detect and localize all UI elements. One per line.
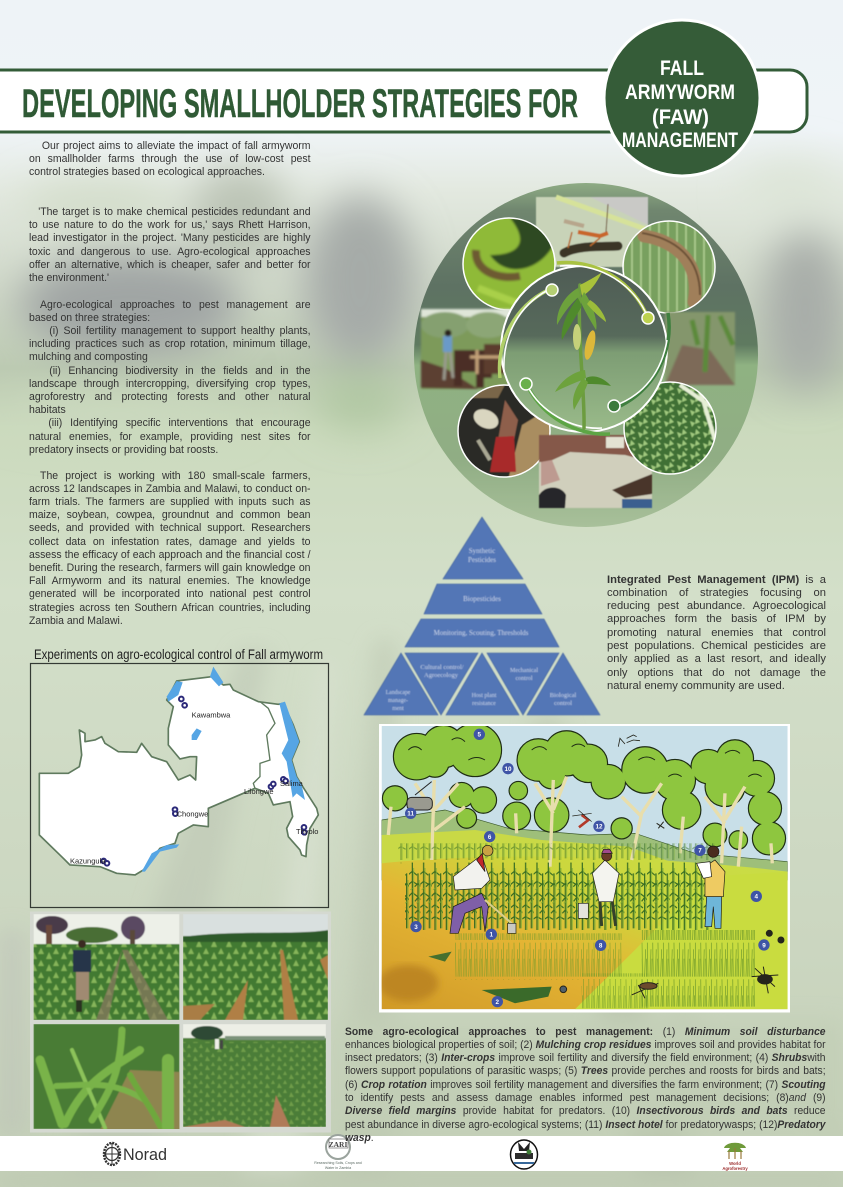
map: experiment sites in Zambia and Malawi: Lilongwe (244, 787, 274, 796)
photo: leafy shrub (624, 382, 716, 474)
text: project activities: farm trials. The farmers are supplied with inputs such as (29, 496, 311, 508)
text: Rhett Harrison quote: offer an alternative, which is cheaper, safer and better for (29, 259, 311, 271)
IPM pyramid: control (516, 676, 533, 682)
text: agro-ecological approaches key: (6) Crop rotation improves soil fertility management and diversifies the farm environment; (7) Scouting (345, 1079, 826, 1091)
text: Integrated Pest Management: combination of strategies focusing on (607, 587, 826, 599)
text: Rhett Harrison quote: 'The target is to make chemical pesticides redundant and (38, 206, 311, 218)
IPM pyramid: ment (392, 706, 404, 712)
photo: farmer in field (34, 914, 180, 1020)
text: Integrated Pest Management (607, 574, 826, 692)
text: agro-ecological approaches key: Some agro-ecological approaches to pest management: (1) Minimum soil disturbance (345, 1026, 826, 1038)
text: Rhett Harrison quote: to use nature to do the work for us,' says Rhett Harrison, (29, 219, 311, 231)
IPM pyramid (364, 517, 600, 715)
number markers: 1 (490, 932, 494, 939)
IPM pyramid: Synthetic (469, 547, 495, 555)
badge: FAW management: ARMYWORM (625, 81, 735, 104)
badge: FAW management: (FAW) (652, 106, 709, 129)
text: project activities: Fall Armyworm and its natural enemies. The knowledge (29, 575, 311, 587)
insects and birds (560, 735, 784, 998)
text: project activities: benefit. During the research, farmers will gain knowledge on (29, 562, 311, 574)
text: three strategies: habitats (29, 404, 66, 416)
text: project summary (29, 140, 311, 178)
tree crowns (383, 724, 785, 867)
text: agro-ecological approaches key (345, 1026, 826, 1144)
photo: close-up maize leaves (34, 1024, 180, 1130)
text: Rhett Harrison quote: lead investigator in the project. 'Many pesticides are highly (29, 232, 311, 244)
number markers (405, 729, 770, 1007)
text: three strategies: predatory insects or providing bat roosts. (29, 444, 218, 456)
logo: ZARI (314, 1135, 362, 1170)
text: agro-ecological approaches key: pest abundance in diverse agro-ecological systems; (11) Insect hotel for predatorywasps; (12)Predatory (345, 1119, 826, 1131)
IPM pyramid: control (554, 700, 572, 707)
text: three strategies: (ii) Enhancing biodiversity in the fields and in the (49, 365, 311, 377)
text: three strategies (29, 298, 311, 456)
circular photo collage (414, 183, 758, 527)
text: project activities: The project is working with 180 small-scale farmers, (40, 470, 311, 482)
text: Integrated Pest Management: reducing pest abundance. Agroecological (607, 600, 826, 612)
IPM pyramid: Host plant (472, 693, 497, 699)
map: experiment sites in Zambia and Malawi: Experiments on agro-ecological control of Fall armyworm (34, 647, 323, 662)
text: project summary: on smallholder farms through the use of low-cost pest (29, 153, 311, 165)
number markers: 12 (595, 824, 603, 831)
centre circle with maize (500, 263, 669, 434)
logo: ZARI: Water in Zambia (325, 1166, 351, 1170)
map: experiment sites in Zambia and Malawi: Chongwe (177, 809, 208, 818)
badge: FAW management (604, 20, 760, 176)
number markers: 10 (504, 766, 512, 773)
logo: World Agroforestry: World (729, 1161, 741, 1166)
text: three strategies: including practices such as crop rotation, minimum tillage, (29, 338, 311, 350)
text: agro-ecological approaches key: to identify pests and assess damage enables informed pest management decisions; (8)and (9) (345, 1092, 826, 1104)
text: project activities: maize, soybean, cowpea, groundnut and common bean (29, 509, 311, 521)
text: three strategies: mulching and composting (29, 351, 148, 363)
photo grid: field trials (30, 912, 331, 1132)
footer logo band (0, 1135, 843, 1171)
text: agro-ecological approaches key: insect predators; (3) Inter-crops improve soil fertility and diversify the field environment; (4) Shrubswith (345, 1052, 826, 1064)
text: Rhett Harrison quote (29, 206, 311, 284)
text: agro-ecological approaches key: wasp. (345, 1132, 374, 1144)
text: Integrated Pest Management: only options that do not damage the (607, 667, 826, 679)
person: woman (578, 849, 619, 926)
IPM pyramid: Agroecology (424, 672, 459, 679)
logo: World Agroforestry (722, 1143, 748, 1171)
text: three strategies: agroforestry and protecting forests and other natural (29, 391, 311, 403)
number markers: 7 (698, 848, 702, 855)
number markers: 3 (414, 924, 418, 931)
IPM pyramid: Monitoring, Scouting, Thresholds (434, 629, 529, 637)
text: project activities: collect data on infestation rates, damage and yields to (29, 536, 311, 548)
logo: ZARI: Researching Soils, Crops and (314, 1161, 362, 1165)
logo: Norad: Norad (123, 1145, 167, 1164)
text: Rhett Harrison quote: the environment.' (29, 272, 109, 284)
text: Rhett Harrison quote: toxic and dangerous to use. Agro-ecological approaches (29, 246, 311, 258)
photo: woman winnowing (458, 386, 550, 476)
text: project activities (29, 470, 311, 627)
maize plant (555, 272, 611, 428)
map: experiment sites in Zambia and Malawi: Kawambwa (192, 711, 231, 720)
IPM pyramid: manage- (388, 698, 408, 704)
IPM pyramid: resistance (472, 701, 496, 707)
text: three strategies: based on three strategies: (29, 312, 150, 324)
text: Integrated Pest Management: approaches form the basis of IPM by (607, 613, 826, 625)
text: agro-ecological approaches key: Diverse field margins provide habitat for predators. (10) Insectivorous birds and bats reduce (345, 1105, 826, 1117)
text: three strategies: natural enemies, for example, providing nest sites for (29, 431, 311, 443)
logo: ZARI: ZARI (329, 1140, 347, 1149)
text: project summary: Our project aims to alleviate the impact of fall armyworm (42, 140, 311, 152)
number markers: 11 (407, 811, 414, 818)
text: project activities: strategies across ten Southern African countries, including (29, 602, 311, 614)
title banner (0, 70, 807, 132)
number markers: 9 (762, 942, 766, 949)
IPM pyramid: Biopesticides (463, 595, 501, 603)
photo: caterpillar on leaf, left (464, 218, 554, 310)
person: farmer with hoe (450, 845, 516, 933)
text: Integrated Pest Management: pest populations. Chemical pesticides are (607, 640, 826, 652)
text: Integrated Pest Management: promoting natural enemies that control (607, 627, 826, 639)
text: agro-ecological approaches key: flowers support populations of parasitic wasps; (5) Trees provide perches and roosts for birds and bats; (345, 1065, 826, 1077)
person: scout (697, 846, 725, 928)
text: Integrated Pest Management: Integrated Pest Management (IPM) is a (607, 574, 826, 586)
text: three strategies: Agro-ecological approaches to pest management are (40, 298, 311, 310)
number markers: 5 (478, 732, 482, 739)
text: Integrated Pest Management: only applied as a last resort, and ideally (607, 653, 826, 665)
number markers: 4 (755, 894, 759, 901)
photo: caterpillar on leaf, right (624, 222, 714, 312)
text: project activities: Zambia and Malawi. (29, 615, 123, 627)
IPM pyramid: Landscape (386, 690, 411, 696)
number markers: 2 (496, 999, 500, 1006)
photo: rows with two people (183, 1024, 326, 1127)
number markers: 8 (599, 943, 603, 950)
text: project activities: generated will be incorporated into national pest control (29, 588, 311, 600)
illustration: agro-ecological farm (378, 724, 790, 1012)
map: experiment sites in Zambia and Malawi: Thyolo (296, 827, 318, 836)
text: Integrated Pest Management: natural enemy community are used. (607, 680, 785, 692)
IPM pyramid: Pesticides (468, 556, 496, 564)
photo: sorting maize (539, 435, 652, 508)
text: three strategies: landscape through intercropping, diversifying crop types, (29, 378, 311, 390)
text: project summary: control strategies based on ecological approaches. (29, 166, 265, 178)
badge: FAW management: FALL (660, 57, 704, 80)
photo: maize rows and cloudy sky (183, 914, 328, 1020)
map: experiment sites in Zambia and Malawi: Kazungula (70, 857, 106, 866)
IPM pyramid: Biological (550, 692, 577, 699)
insect hotel (407, 782, 432, 810)
text: project activities: assess the efficacy of each approach and the financial cost / (29, 549, 311, 561)
logo: department crest (510, 1140, 538, 1169)
map: experiment sites in Zambia and Malawi (30, 647, 328, 908)
text: agro-ecological approaches key: enhances biological properties of soil; (2) Mulching crop residues improves soil and provides habitat for (345, 1039, 826, 1051)
text: three strategies: (i) Soil fertility management to support healthy plants, (49, 325, 311, 337)
badge: FAW management: MANAGEMENT (622, 129, 738, 152)
IPM pyramid: Mechanical (510, 668, 538, 674)
logo: Norad (104, 1143, 167, 1165)
photo: parasitic wasp on caterpillar (536, 197, 648, 267)
map: experiment sites in Zambia and Malawi: Salima (280, 779, 304, 788)
logo: World Agroforestry: Agroforestry (722, 1166, 748, 1171)
text: project activities: across 12 landscapes in Zambia and Malawi, to conduct on- (29, 483, 311, 495)
photo: maize crop and residue (665, 312, 735, 385)
photo: ox ploughing (421, 309, 511, 389)
text: project activities: seeds, and provided with technical support. Researchers (29, 522, 311, 534)
IPM pyramid: Cultural control/ (420, 664, 464, 671)
number markers: 6 (488, 834, 492, 841)
text: three strategies: (iii) Identifying specific interventions that encourage (48, 417, 311, 429)
